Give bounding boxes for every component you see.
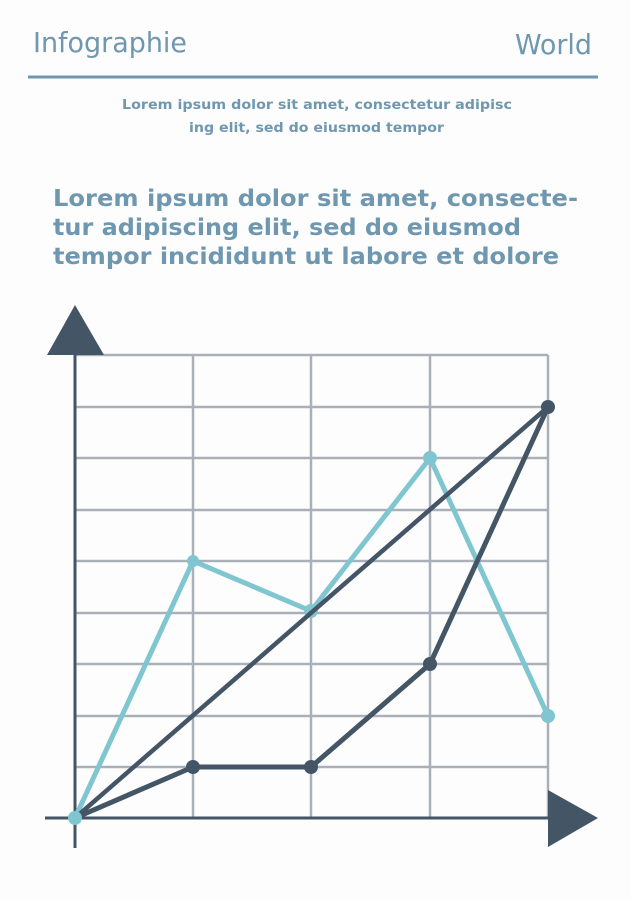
header: title right: World xyxy=(515,28,592,61)
main text block: Lorem ipsum dolor sit amet, consecte- xyxy=(53,186,578,212)
axes xyxy=(45,305,598,848)
main text block xyxy=(53,186,578,270)
line chart xyxy=(45,305,598,848)
main text block: tempor incididunt ut labore et dolore xyxy=(53,244,559,270)
subtitle xyxy=(122,98,512,136)
subtitle: ing elit, sed do eiusmod tempor xyxy=(189,121,445,136)
series: teal xyxy=(75,451,555,818)
subtitle: Lorem ipsum dolor sit amet, consectetur adipisc xyxy=(122,98,512,113)
header: title left: Infographie xyxy=(33,26,187,59)
main text block: tur adipiscing elit, sed do eiusmod xyxy=(53,215,521,241)
series: dark diagonal and curve xyxy=(68,400,555,825)
